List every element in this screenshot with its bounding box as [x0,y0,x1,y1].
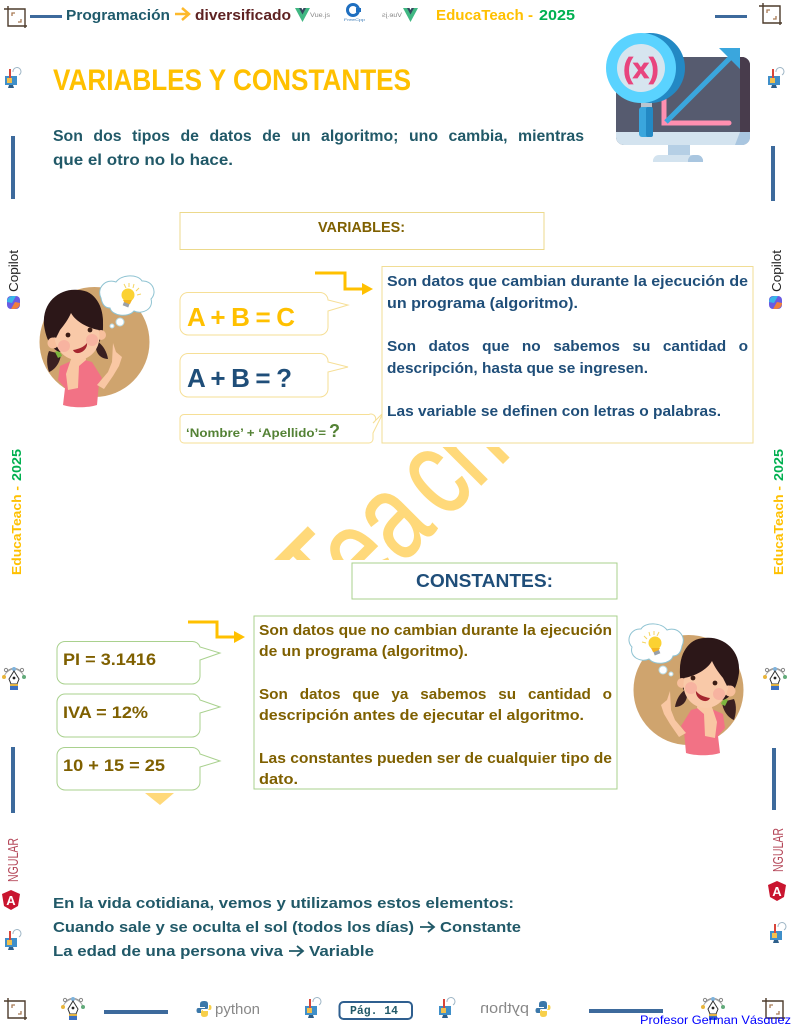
panel: constantes description [254,616,617,789]
bubble: PI: PI = 3.1416 [63,650,156,669]
decorative bar [771,146,775,201]
bubble: Nombre + Apellido: ‘Nombre’ + ‘Apellido’= [186,428,326,440]
arrow: header [175,8,189,20]
arrow: constantes [188,622,245,643]
icon: C++ logo: FreeCpp [344,17,366,22]
panel: variables description: un programa (algoritmo). [387,295,578,312]
panel: constantes description: Las constantes pueden ser de cualquier tipo de [259,750,612,767]
panel: variables heading [180,212,544,250]
icon: pen tool [2,667,26,690]
panel: variables description: Son datos que cambian durante la ejecución de [387,273,748,290]
intro text: que el otro no lo hace. [53,152,233,169]
arrow: to Variable [289,946,303,956]
logo: mirrored python: python [480,1000,529,1017]
header text: EducaTeach 2025 [436,7,575,24]
bubble: IVA: IVA = 12% [63,703,148,722]
right side strip [763,68,787,943]
label: EducaTeach 2025: EducaTeach - [9,486,24,575]
illustration: girl thinking (left) [40,276,154,407]
icon: monitor with magnifier [606,33,750,162]
label: EducaTeach 2025 [771,449,786,575]
logo: mirrored python [480,1000,550,1017]
panel: variables description: Son datos que no sabemos su cantidad o [387,338,748,355]
header text: EducaTeach 2025: 2025 [539,7,575,24]
panel: variables description [382,266,753,443]
icon: chart monitor [770,923,786,943]
bubble: A + B = ?: A + B = ? [187,363,292,393]
panel: constantes description: de un programa (algoritmo). [259,643,468,660]
label: Copilot: Copilot [6,250,21,292]
bubble: Nombre + Apellido [180,413,383,443]
left side strip [2,68,26,950]
header text: Programación diversificado: Programación [66,7,170,24]
watermark: EducaTeach fragment: Teach [252,370,532,650]
icon: Vue.js logo [295,8,331,22]
decorative bar [104,1010,168,1014]
intro text [53,128,584,169]
panel: constantes description: Son datos que ya sabemos su cantidad o [259,686,612,703]
label: Copilot [769,250,784,309]
panel: constantes heading [352,563,617,599]
header text: EducaTeach 2025: EducaTeach - [436,7,533,24]
label: Copilot [6,250,21,309]
title: VARIABLES Y CONSTANTES [53,64,411,97]
bubble: A + B = ? [180,353,348,397]
decorative bar [11,747,15,813]
illustration: girl thinking (right) [629,624,744,755]
arrow: variables [315,273,373,295]
panel: variables description: Las variable se definen con letras o palabras. [387,403,721,420]
label: EducaTeach 2025: EducaTeach - [771,486,786,575]
label: EducaTeach 2025: 2025 [771,449,786,481]
panel: constantes description: dato. [259,771,298,788]
header text: Programación diversificado [66,7,291,24]
decorative blue bar right [715,15,747,18]
label: Angular [2,838,22,910]
footer [61,997,791,1024]
icon: C++ logo [344,4,366,22]
bubble: A + B = C [180,292,348,335]
closing text: Constante [440,919,521,936]
label: Angular: A [772,884,782,899]
logo: python: python [215,1001,260,1018]
icon: chart monitor [305,998,321,1018]
label: Angular: NGULAR [770,828,787,872]
icon: mirrored Vue.js logo [381,8,418,22]
panel: constantes description: Son datos que no cambian durante la ejecución [259,622,612,639]
icon: pen tool [763,667,787,690]
icon: chart monitor [439,998,455,1018]
arrow: to Constante [420,922,434,932]
page number [340,1002,412,1019]
intro text: Son dos tipos de datos de un algoritmo; uno cambia, mientras [53,128,584,145]
bubble: 10 + 15 = 25 [57,747,220,790]
label: EducaTeach 2025: 2025 [9,449,24,481]
label: Angular: NGULAR [5,838,22,882]
decorative blue bar left [30,15,62,18]
closing text: En la vida cotidiana, vemos y utilizamos estos elementos: [53,895,514,912]
icon: mirrored Vue.js logo: Vue.js [381,12,402,19]
panel: constantes heading: CONSTANTES: [416,570,553,591]
bubble: A + B = C: A + B = C [187,302,295,332]
decorative bar [11,136,15,199]
icon: pen tool [61,997,85,1020]
watermark: lower fragment [145,793,174,805]
closing text: Variable [309,943,374,960]
label: Angular [768,828,787,901]
bubble: 10 + 15 = 25: 10 + 15 = 25 [63,756,165,775]
icon: chart monitor [5,68,21,88]
icon: chart monitor [5,930,21,950]
closing text [53,895,521,960]
decorative bar [772,748,776,810]
label: Angular: A [6,893,16,908]
header bar [30,4,747,24]
icon: pen tool [701,997,725,1020]
icon: monitor with magnifier: (x) [623,53,659,85]
header text: Programación diversificado: diversificado [195,7,291,24]
page number: Pág. 14 [350,1004,398,1018]
bubble: Nombre + Apellido: ? [329,421,340,441]
icon: chart monitor [768,68,784,88]
closing text: La edad de una persona viva [53,943,284,960]
bubble: PI [57,641,220,684]
panel: variables heading: VARIABLES: [318,219,405,236]
label: EducaTeach 2025 [9,449,24,575]
icon: Vue.js logo: Vue.js [310,12,331,19]
panel: variables description: descripción, hasta que se ingresen. [387,360,648,377]
label: Copilot: Copilot [769,250,784,292]
closing text: Cuando sale y se oculta el sol (todos los días) [53,919,414,936]
bubble: IVA [57,694,220,737]
panel: constantes description: descripción antes de ejecutar el algoritmo. [259,707,584,724]
decorative bar [589,1009,663,1013]
